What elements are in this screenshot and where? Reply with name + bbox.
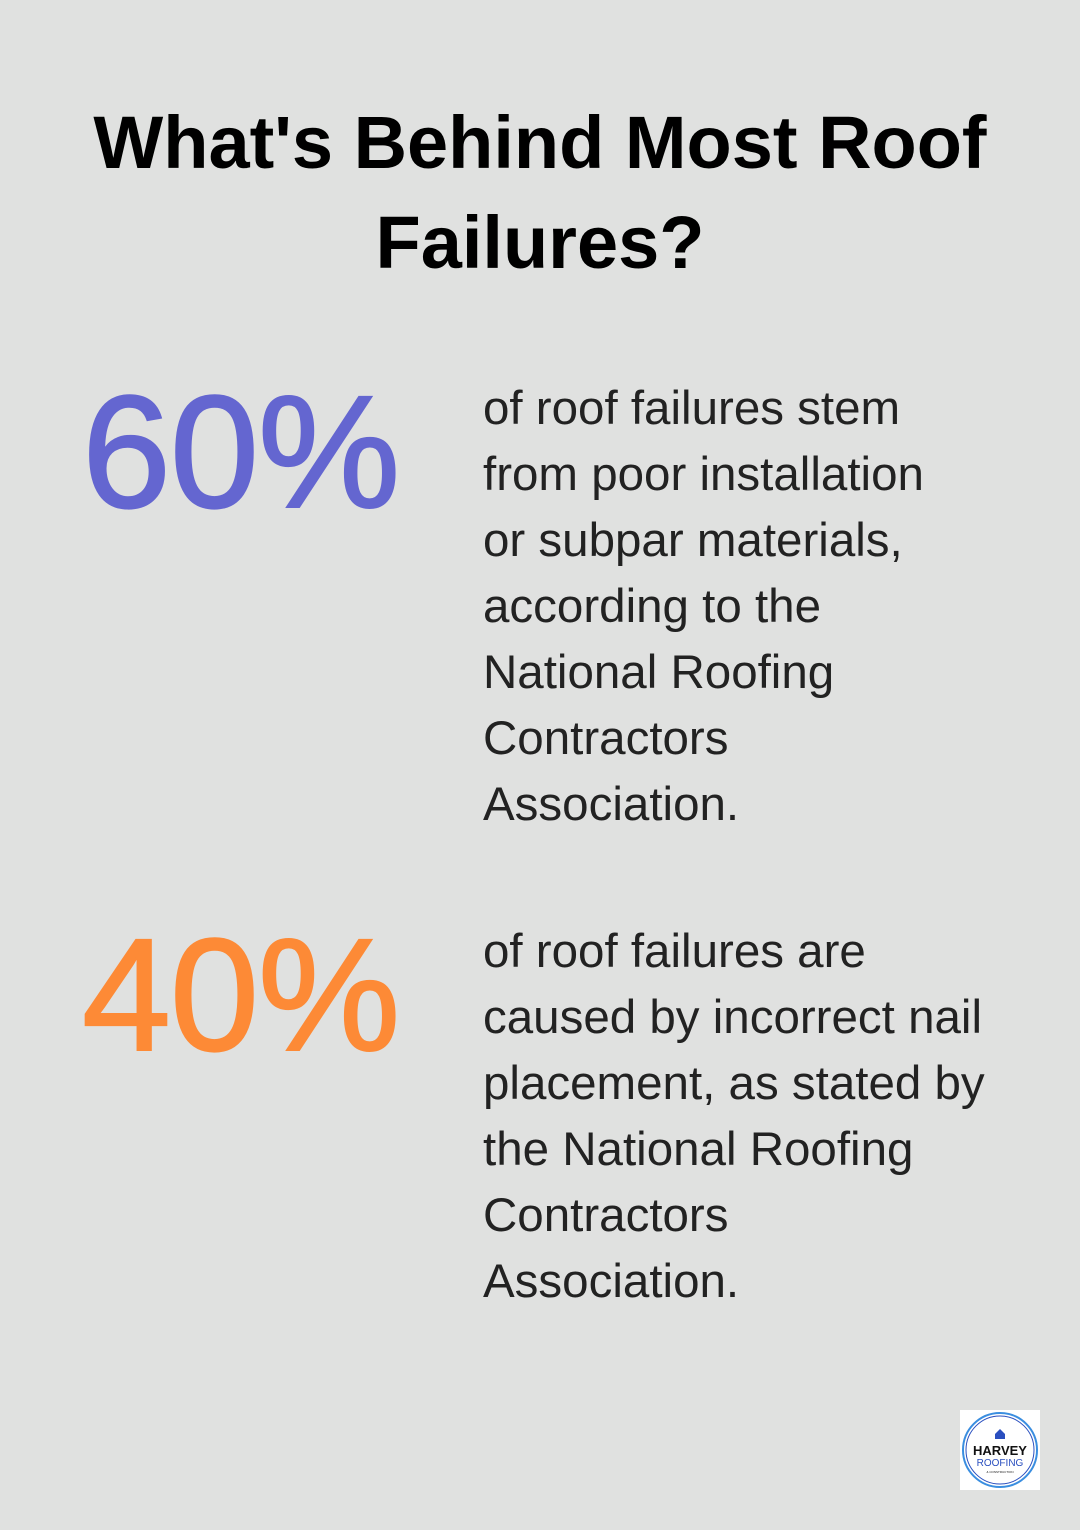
text: 60% description: Contractors — [483, 712, 729, 765]
text: 40% description: Association. — [483, 1255, 739, 1308]
text: 40% description: Contractors — [483, 1189, 729, 1242]
text: 60% description: from poor installation — [483, 448, 924, 501]
title: Failures? — [376, 201, 704, 284]
logo: & CONSTRUCTION — [986, 1470, 1014, 1474]
text: 60% description: according to the — [483, 580, 821, 633]
logo: HARVEY — [973, 1443, 1027, 1458]
logo: ROOFING — [977, 1458, 1024, 1469]
text: 40% description: the National Roofing — [483, 1123, 913, 1176]
title — [93, 101, 987, 284]
stat: 40%: 40% — [82, 905, 399, 1084]
text: 60% description: Association. — [483, 778, 739, 831]
text: 40% description: of roof failures are — [483, 925, 866, 978]
logo — [960, 1410, 1040, 1490]
title: What's Behind Most Roof — [93, 101, 987, 184]
text: 40% description: placement, as stated by — [483, 1057, 985, 1110]
text: 60% description: of roof failures stem — [483, 382, 900, 435]
text: 60% description: or subpar materials, — [483, 514, 903, 567]
text: 60% description — [483, 382, 924, 831]
text: 40% description — [483, 925, 985, 1308]
text: 40% description: caused by incorrect nail — [483, 991, 982, 1044]
stat: 60%: 60% — [82, 362, 399, 541]
text: 60% description: National Roofing — [483, 646, 834, 699]
